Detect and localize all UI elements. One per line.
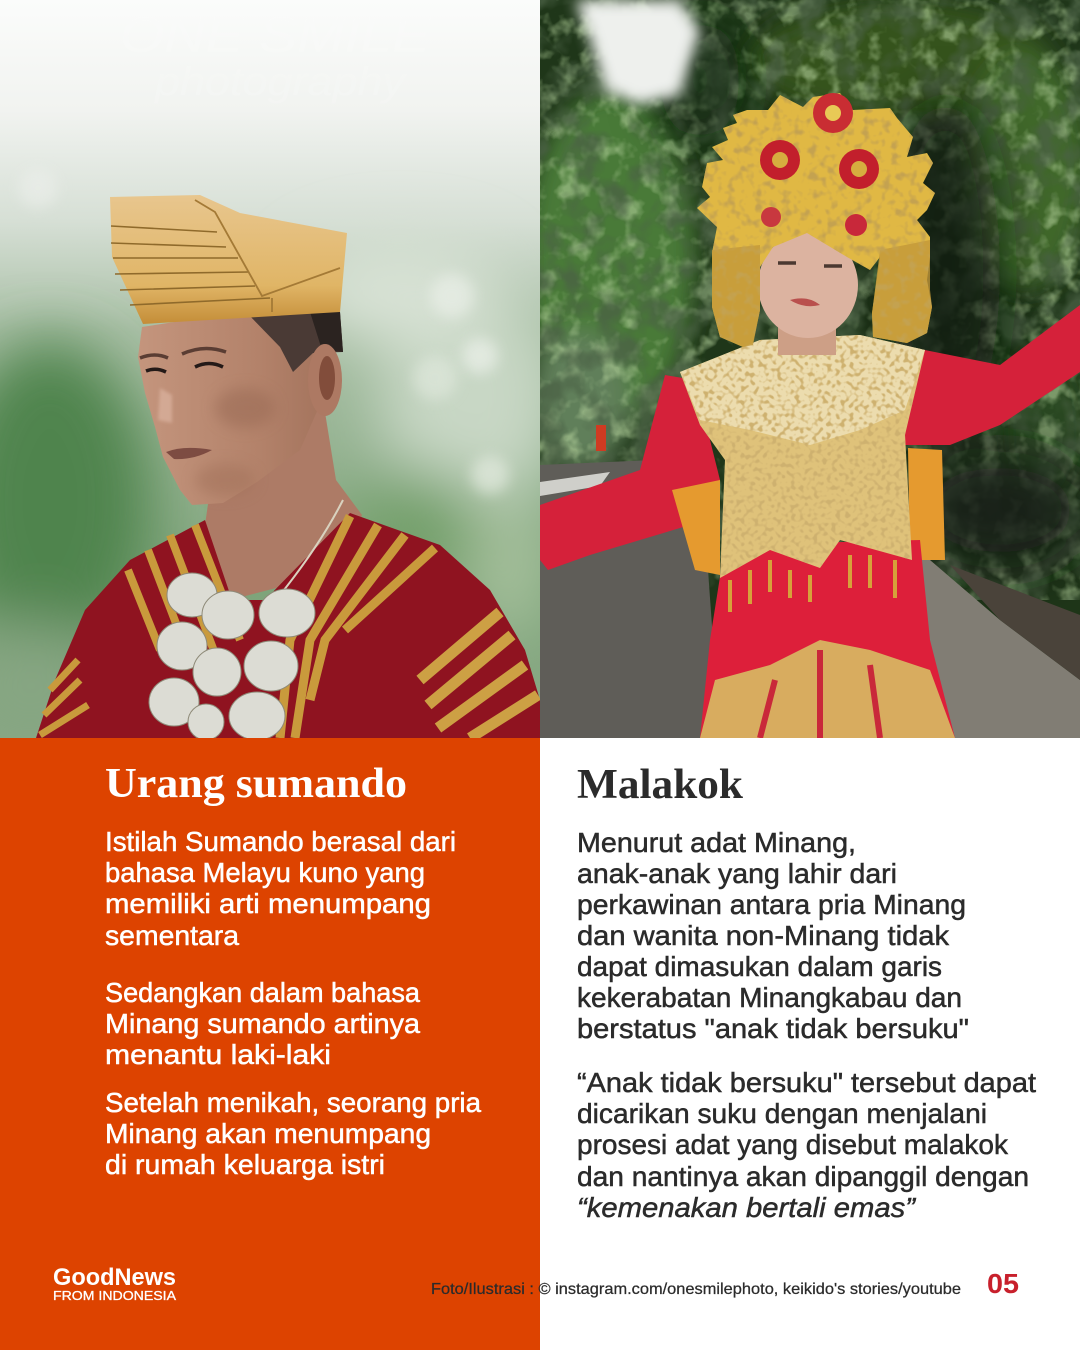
gold cape — [680, 335, 925, 578]
logo: GoodNews from Indonesia — [53, 1264, 177, 1303]
cap — [110, 195, 347, 324]
paragraph: malakok ceremony: “Anak tidak bersuku" tersebut dapat — [577, 1067, 1036, 1098]
silver ornaments — [149, 573, 315, 740]
golden headdress — [697, 93, 935, 347]
paragraph: children of mixed marriage: berstatus "anak tidak bersuku" — [577, 1013, 969, 1044]
paragraph: malakok ceremony: dan nantinya akan dipanggil dengan — [577, 1161, 1029, 1192]
paragraph: children of mixed marriage: kekerabatan Minangkabau dan — [577, 982, 962, 1013]
neck and face — [778, 325, 836, 355]
logo: GoodNews from Indonesia: FROM INDONESIA — [53, 1289, 177, 1303]
paragraph: children of mixed marriage — [577, 827, 969, 1044]
figure: man — [36, 195, 540, 740]
paragraph: children of mixed marriage: perkawinan antara pria Minang — [577, 889, 966, 920]
photo: girl in red and gold Minang costume — [525, 0, 1080, 738]
paragraph: origin of the term — [105, 826, 456, 951]
paragraph: after marriage — [105, 1087, 481, 1180]
heading: Urang sumando: Urang sumando — [105, 761, 407, 807]
panel: orange text column background — [0, 738, 540, 1350]
paragraph: malakok ceremony — [577, 1067, 1036, 1223]
paragraph: children of mixed marriage: anak-anak yang lahir dari — [577, 858, 897, 889]
paragraph: Minang meaning: Minang sumando artinya — [105, 1008, 420, 1039]
paragraph: origin of the term: Istilah Sumando berasal dari — [105, 826, 456, 857]
panel text: Urang sumando — [105, 761, 481, 1180]
headdress flowers — [813, 93, 853, 133]
paragraph: Minang meaning: Sedangkan dalam bahasa — [105, 977, 420, 1008]
paragraph: children of mixed marriage: Menurut adat Minang, — [577, 827, 856, 858]
paragraph: malakok ceremony: dicarikan suku dengan menjalani — [577, 1098, 987, 1129]
figure: girl — [540, 90, 1080, 738]
paragraph: Minang meaning — [105, 977, 420, 1070]
paragraph: Minang meaning: menantu laki-laki — [105, 1039, 331, 1070]
paragraph: children of mixed marriage: dapat dimasukan dalam garis — [577, 951, 942, 982]
paragraph: origin of the term: sementara — [105, 920, 239, 951]
foliage texture — [540, 0, 1080, 600]
watermark: One Smile photography: photography — [154, 60, 408, 104]
paragraph: origin of the term: bahasa Melayu kuno yang — [105, 857, 425, 888]
paragraph: malakok ceremony: “kemenakan bertali emas” — [577, 1192, 917, 1223]
paragraph: origin of the term: memiliki arti menumpang — [105, 888, 431, 919]
photo credit: Foto/Ilustrasi : © instagram.com/onesmilephoto, keikido's stories/youtube — [431, 1281, 961, 1298]
logo: GoodNews from Indonesia: GoodNews — [53, 1264, 176, 1291]
panel text: Malakok — [577, 762, 1036, 1223]
sleeves — [540, 375, 720, 570]
heading: Malakok: Malakok — [577, 762, 744, 808]
page number: 05 — [987, 1268, 1019, 1299]
paragraph: after marriage: Minang akan menumpang — [105, 1118, 431, 1149]
watermark: One Smile photography: ONE SMILE — [120, 7, 431, 63]
paragraph: after marriage: di rumah keluarga istri — [105, 1149, 385, 1180]
paragraph: children of mixed marriage: dan wanita non-Minang tidak — [577, 920, 950, 951]
photo: man wearing Minang cap and red costume — [0, 41, 540, 738]
shirt — [36, 513, 540, 738]
paragraph: after marriage: Setelah menikah, seorang pria — [105, 1087, 481, 1118]
watermark: One Smile photography — [120, 7, 431, 104]
paragraph: malakok ceremony: prosesi adat yang disebut malakok — [577, 1129, 1009, 1160]
skirt — [700, 540, 955, 738]
